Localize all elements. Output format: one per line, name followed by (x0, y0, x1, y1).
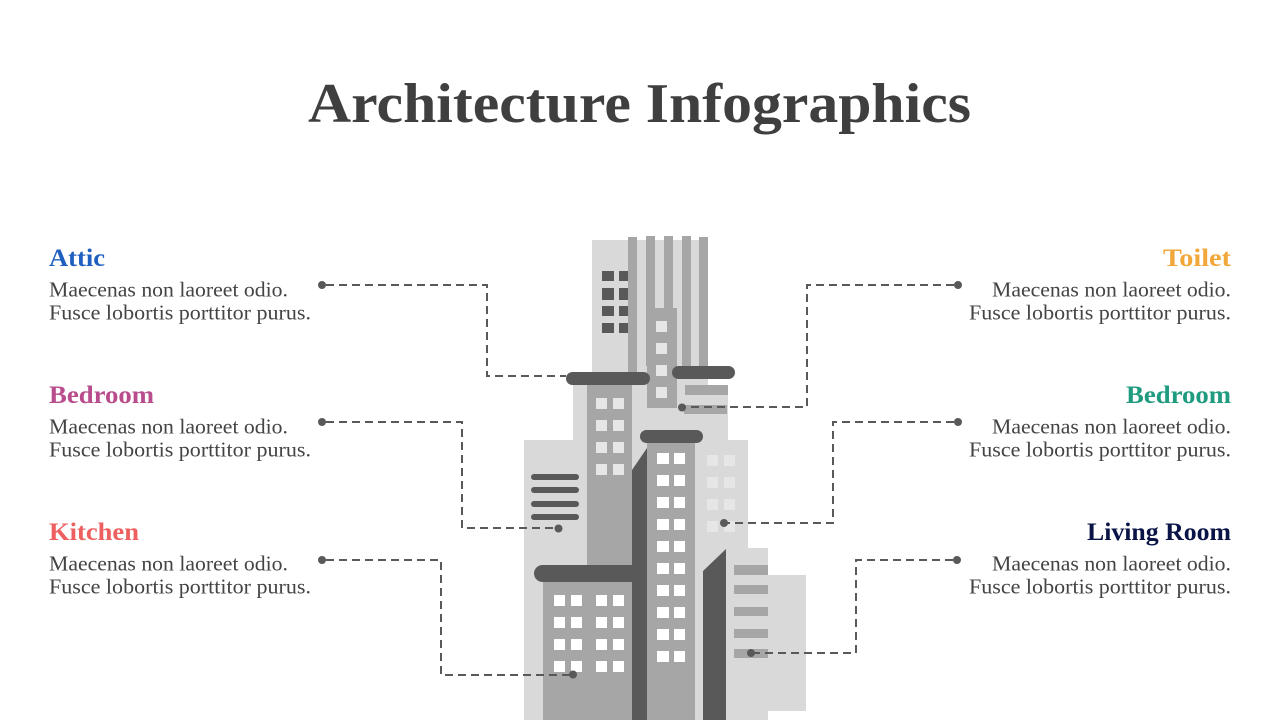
left block vents (531, 474, 579, 520)
text block: Bedroom left: Bedroom (49, 380, 154, 409)
text block: Bedroom left: Maecenas non laoreet odio. (49, 414, 288, 438)
text block: Attic (49, 243, 311, 324)
leader: Kitchen (318, 556, 577, 678)
text block: Bedroom left: Fusce lobortis porttitor purus. (49, 438, 311, 462)
middle light block (524, 385, 806, 720)
leader: Bedroom left (318, 418, 562, 532)
leader: Toilet (678, 281, 962, 412)
leader: Bedroom right (720, 418, 962, 527)
illustration: city buildings (524, 236, 806, 720)
text block: Bedroom right: Fusce lobortis porttitor purus. (969, 438, 1231, 462)
right faint windows (707, 455, 735, 532)
text block: Attic: Maecenas non laoreet odio. (49, 278, 288, 302)
text block: Living Room: Living Room (1087, 517, 1231, 546)
text block: Kitchen (49, 517, 311, 598)
text block: Living Room: Fusce lobortis porttitor purus. (969, 574, 1231, 598)
lower left building (534, 565, 634, 720)
centre tower with windows (647, 308, 677, 408)
text block: Kitchen: Maecenas non laoreet odio. (49, 552, 288, 576)
text block: Attic: Attic (49, 243, 105, 272)
title: Architecture Infographics (308, 73, 971, 135)
text block: Living Room: Maecenas non laoreet odio. (992, 552, 1231, 576)
text block: Toilet (969, 243, 1232, 324)
back tower (592, 236, 708, 390)
front centre tower (632, 430, 703, 720)
left grey tower (566, 372, 650, 570)
text block: Toilet: Fusce lobortis porttitor purus. (969, 300, 1231, 324)
leader: Living Room (747, 556, 961, 657)
text block: Toilet: Maecenas non laoreet odio. (992, 278, 1231, 302)
text block: Kitchen: Fusce lobortis porttitor purus. (49, 574, 311, 598)
text block: Living Room (969, 517, 1231, 598)
text block: Bedroom right: Bedroom (1126, 380, 1231, 409)
upper right roof and strips (672, 366, 735, 414)
text block: Bedroom right (969, 380, 1231, 462)
text block: Bedroom left (49, 380, 311, 462)
text block: Bedroom right: Maecenas non laoreet odio. (992, 414, 1231, 438)
text block: Kitchen: Kitchen (49, 517, 139, 546)
text block: Attic: Fusce lobortis porttitor purus. (49, 300, 311, 324)
lower right building (703, 549, 768, 720)
leader: Attic (318, 281, 566, 376)
text block: Toilet: Toilet (1163, 243, 1232, 272)
